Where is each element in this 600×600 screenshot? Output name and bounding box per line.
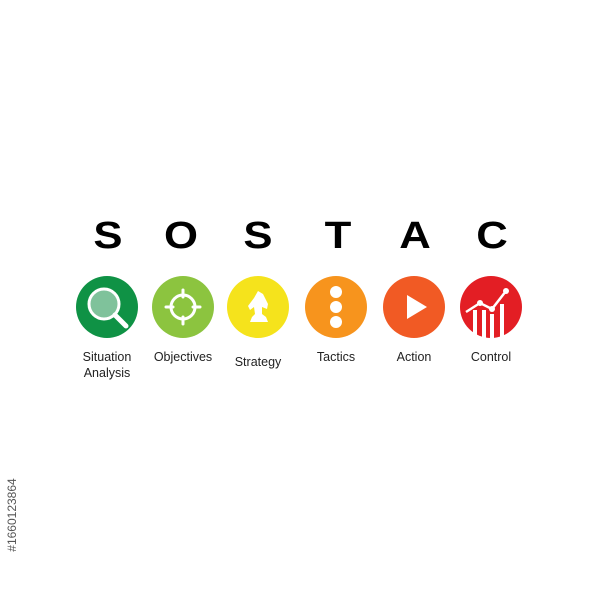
label: tactics: Tactics bbox=[317, 350, 355, 364]
icon: strategy bbox=[227, 276, 289, 338]
icon: tactics bbox=[305, 276, 367, 338]
title letters: A bbox=[399, 215, 431, 257]
title letters: C bbox=[476, 215, 508, 257]
icon: objectives bbox=[152, 276, 214, 338]
label: objectives: Objectives bbox=[154, 350, 212, 364]
label: strategy: Strategy bbox=[235, 355, 281, 369]
label: situation analysis: Analysis bbox=[84, 366, 130, 380]
watermark id: #1660123864 bbox=[5, 478, 19, 552]
title letters: S bbox=[243, 215, 273, 257]
label: situation analysis bbox=[83, 350, 131, 380]
title letters: S bbox=[93, 215, 123, 257]
icon: action bbox=[383, 276, 445, 338]
icon: situation analysis bbox=[76, 276, 138, 338]
title letters: O bbox=[164, 215, 198, 257]
title letters bbox=[93, 215, 508, 257]
label: situation analysis: Situation bbox=[83, 350, 131, 364]
label: action: Action bbox=[397, 350, 431, 364]
label: control: Control bbox=[471, 350, 511, 364]
title letters: T bbox=[325, 215, 351, 257]
icon: control bbox=[460, 276, 522, 338]
